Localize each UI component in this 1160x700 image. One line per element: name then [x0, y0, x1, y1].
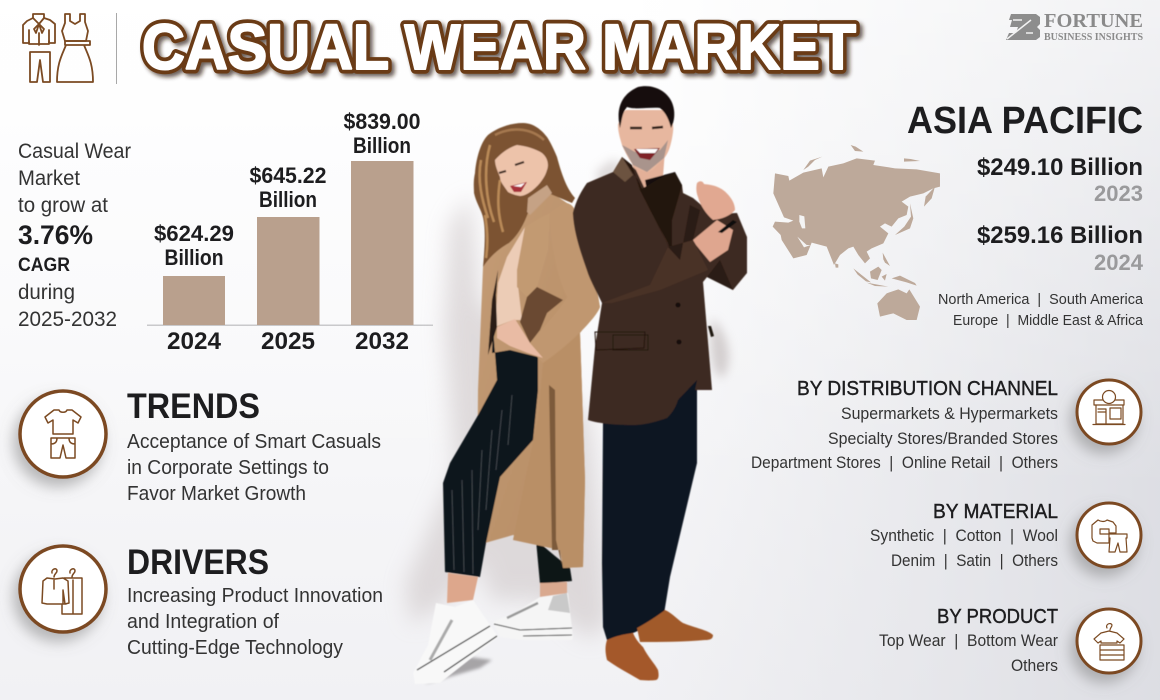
list: Supermarkets & Hypermarkets — [841, 405, 1058, 423]
heading: drivers: DRIVERS — [127, 543, 269, 582]
bar 2024: 2024 — [167, 328, 222, 355]
header divider — [116, 13, 117, 84]
man hair — [619, 86, 674, 128]
list: Department Stores | Online Retail | Others — [751, 454, 1058, 472]
woman smile and eyes — [499, 162, 527, 192]
list — [879, 632, 1058, 675]
woman front ankle — [447, 573, 478, 603]
photo: man — [573, 86, 747, 680]
logo: Fortune Business Insights: BUSINESS INSIGHTS — [1044, 32, 1143, 43]
heading: BY PRODUCT — [937, 606, 1058, 628]
list: Specialty Stores/Branded Stores — [828, 430, 1058, 448]
text block: Asia Pacific values: $259.16 Billion — [977, 222, 1143, 249]
panel: by material — [870, 501, 1141, 570]
man back shoe — [637, 610, 713, 642]
man smile and eyes — [630, 127, 663, 160]
man jacket lapels and folds — [595, 157, 733, 350]
man neck — [628, 150, 665, 190]
icon: t-shirt and shorts — [20, 391, 106, 477]
text block: other regions — [938, 291, 1144, 329]
man face — [618, 110, 673, 172]
photo: woman — [413, 123, 600, 684]
list — [751, 405, 1058, 472]
text block: Asia Pacific values: 2024 — [1094, 250, 1144, 275]
title: CASUAL WEAR MARKET — [142, 11, 856, 83]
panel: by distribution channel — [751, 378, 1141, 472]
drivers description: Increasing Product Innovation — [127, 585, 383, 607]
bar chart — [147, 109, 433, 355]
text block: Asia Pacific values: 2023 — [1094, 181, 1143, 206]
text block: CAGR statement — [18, 140, 131, 331]
icon: store — [1077, 380, 1141, 444]
drivers description: Cutting-Edge Technology — [127, 637, 343, 659]
bar 2024: Billion — [164, 245, 224, 270]
bar 2032: 2032 — [355, 328, 409, 355]
woman turtleneck — [527, 185, 552, 215]
man front shoe — [606, 633, 659, 680]
heading: BY MATERIAL — [933, 501, 1058, 523]
text block: Asia Pacific values — [977, 154, 1144, 275]
text block: CAGR statement: Market — [18, 167, 80, 190]
title: CASUAL WEAR MARKET — [142, 11, 856, 83]
woman trailing leg — [536, 540, 572, 584]
text block: CAGR statement: during — [18, 281, 75, 304]
map: Asia Pacific — [773, 145, 940, 320]
bar 2024: $624.29 — [154, 221, 234, 246]
woman trousers — [443, 327, 538, 577]
man jacket — [573, 157, 747, 425]
woman back sneaker — [493, 593, 573, 640]
bar 2032 — [344, 109, 420, 355]
bar 2032: Billion — [353, 133, 411, 158]
panel: by product — [879, 606, 1141, 675]
bar 2025 — [250, 163, 326, 355]
woman front coat lower — [513, 333, 585, 568]
woman inner top — [495, 227, 525, 327]
trends description — [127, 431, 381, 505]
bar 2024 — [154, 221, 234, 355]
man shirt — [645, 172, 680, 290]
bar 2025: $645.22 — [250, 163, 326, 188]
woman face — [495, 145, 548, 196]
bar 2032: $839.00 — [344, 109, 420, 134]
woman coat shadow fold — [520, 287, 563, 343]
text block: other regions: Europe | Middle East & Africa — [953, 312, 1144, 329]
list — [870, 527, 1058, 570]
icon: sweater and shorts — [1077, 503, 1141, 567]
panel: drivers — [20, 543, 383, 659]
man trousers — [602, 375, 697, 640]
list: Top Wear | Bottom Wear — [879, 632, 1058, 650]
panel: trends — [20, 387, 381, 505]
text block: CAGR statement: 2025-2032 — [18, 308, 117, 331]
woman dark coat gap — [488, 270, 498, 355]
icon: shirt on hanger and stack — [1077, 609, 1141, 673]
trends description: Acceptance of Smart Casuals — [127, 431, 381, 453]
text block: CAGR statement: to grow at — [18, 194, 108, 217]
list: Synthetic | Cotton | Wool — [870, 527, 1058, 545]
woman hand on hip — [497, 319, 543, 358]
bar 2025: Billion — [259, 187, 317, 212]
woman coat back panel — [477, 193, 600, 568]
drivers description — [127, 585, 383, 659]
logo: Fortune Business Insights — [1006, 10, 1143, 43]
logo: Fortune Business Insights: FORTUNE — [1044, 10, 1143, 32]
trends description: in Corporate Settings to — [127, 457, 329, 479]
heading: trends: TRENDS — [127, 387, 260, 426]
woman coat shadow seam — [549, 385, 562, 566]
woman coat sleeve — [530, 203, 600, 363]
woman pinstripes — [452, 395, 512, 574]
woman coat lapel — [517, 213, 550, 297]
heading: BY DISTRIBUTION CHANNEL — [797, 378, 1058, 400]
woman front sneaker — [413, 600, 498, 684]
icon: clothes on hangers — [20, 546, 106, 632]
header icon: suit and dress — [23, 14, 93, 82]
woman back ankle — [540, 582, 567, 600]
wall and floor shadows — [405, 160, 729, 684]
text block: Asia Pacific values: $249.10 Billion — [977, 154, 1143, 181]
region heading: Asia Pacific: ASIA PACIFIC — [907, 100, 1143, 142]
woman hair — [474, 123, 575, 267]
text block: CAGR statement: Casual Wear — [18, 140, 131, 163]
man hands — [693, 181, 737, 262]
man beard — [622, 140, 668, 172]
bar 2025: 2025 — [261, 328, 315, 355]
drivers description: and Integration of — [127, 611, 279, 633]
text block: CAGR statement: CAGR — [18, 255, 70, 276]
list: Others — [1011, 657, 1058, 675]
trends description: Favor Market Growth — [127, 483, 306, 505]
text block: CAGR statement: 3.76% — [18, 220, 93, 250]
list: Denim | Satin | Others — [891, 552, 1058, 570]
text block: other regions: North America | South America — [938, 291, 1144, 308]
